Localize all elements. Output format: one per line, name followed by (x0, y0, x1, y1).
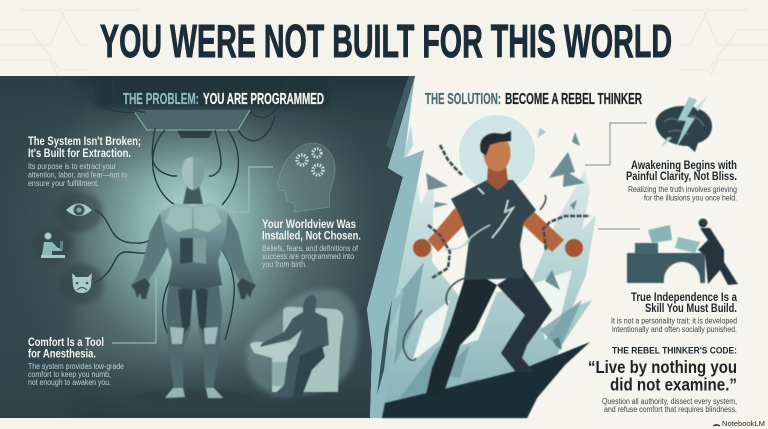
text block: the rebel thinker's code: Question all authority, dissect every system, (602, 397, 737, 406)
text block: the system (28, 136, 141, 188)
floor shadow (131, 389, 255, 403)
arms (132, 213, 256, 286)
chair back (272, 307, 343, 392)
text block: comfort: not enough to awaken you. (28, 378, 111, 387)
heading: the solution: THE SOLUTION: (425, 91, 501, 108)
neck (183, 186, 203, 204)
text block: comfort: comfort to keep you numb, (28, 370, 111, 379)
neck (487, 166, 508, 190)
text block: worldview: Your Worldview Was (262, 219, 356, 231)
text block: awakening: Awakening Begins with (631, 160, 737, 172)
lightning divider (367, 76, 424, 418)
machine and cables (80, 76, 290, 380)
text block: comfort: Comfort Is a Tool (28, 337, 104, 349)
text block: comfort: The system provides low-grade (28, 362, 124, 371)
text block: worldview: success are programmed into (262, 252, 354, 261)
text block: independence: True Independence Is a (631, 292, 737, 304)
robot human figure (131, 157, 256, 403)
panel: the solution background (375, 76, 768, 418)
darker shard facets (385, 262, 582, 417)
icon: brain with lightning (656, 95, 712, 152)
illustration: person in armchair with smoke (246, 289, 358, 400)
fists (413, 239, 583, 257)
cables (80, 76, 290, 380)
icon: head with gears (278, 143, 335, 212)
broken chains (428, 145, 590, 278)
heading: the problem: YOU ARE PROGRAMMED (203, 91, 324, 108)
NotebookLM logo: NotebookLM (722, 419, 765, 428)
smoke (246, 289, 358, 395)
chest plates (165, 206, 222, 232)
text block: independence (611, 292, 737, 334)
feet (165, 388, 223, 398)
halo (459, 115, 535, 191)
text block: awakening (626, 160, 737, 202)
text block: the rebel thinker's code: and refuse comfort that requires blindness. (604, 405, 737, 414)
text block: the rebel thinker's code (588, 346, 737, 414)
heading: the problem (123, 91, 324, 108)
text block: the system: The System Isn't Broken; (28, 136, 141, 148)
text block: the system: It's Built for Extraction. (28, 148, 131, 160)
knee plates (170, 327, 218, 344)
head (182, 157, 204, 190)
shard burst behind the man (378, 125, 596, 418)
swirl (445, 225, 490, 250)
text block: independence: intentionally and often socially punished. (612, 325, 737, 334)
panel: the problem background (0, 60, 415, 429)
head (484, 134, 510, 172)
text block: the system: attention, labor, and fear—not to (28, 170, 127, 180)
illustration: rebel thinker breaking chains (382, 128, 590, 418)
icon: person building wall (627, 218, 738, 285)
loose cables (403, 195, 546, 360)
text block: worldview: Beliefs, fears, and definitions of (262, 244, 359, 253)
left arm (428, 208, 467, 252)
inner leg shadows (178, 285, 208, 335)
heading: the solution: BECOME A REBEL THINKER (505, 91, 642, 108)
text block: worldview (262, 219, 361, 269)
heading: the solution (425, 91, 642, 108)
text block: the system: ensure your fulfillment. (28, 179, 99, 188)
legs (166, 272, 222, 390)
shirt (451, 180, 536, 280)
text block: the system: Its purpose is to extract your (28, 162, 116, 171)
text block: independence: It is not a personality trait: it is developed (611, 316, 737, 326)
seated figure (260, 295, 329, 398)
connector lines: right side (585, 123, 647, 229)
text block: the rebel thinker's code: “Live by nothing you (588, 357, 737, 377)
abdomen (180, 238, 193, 264)
text block: awakening: Painful Clarity, Not Bliss. (626, 171, 737, 183)
shirt crack highlight (478, 188, 513, 238)
flying shards (426, 128, 585, 350)
front leg (497, 268, 552, 372)
connector lines (112, 167, 273, 343)
icon: person at desk (32, 227, 72, 263)
text block: awakening: Realizing the truth involves grieving (628, 185, 737, 194)
text block: the rebel thinker's code: THE REBEL THINKER'S CODE: (612, 346, 737, 356)
text block: awakening: for the illusions you once held. (644, 194, 737, 202)
head sockets (177, 173, 182, 178)
text block: comfort: for Anesthesia. (28, 348, 96, 360)
back leg (426, 268, 497, 395)
heading: the problem: THE PROBLEM: (123, 91, 199, 108)
hands (131, 278, 256, 299)
torso (160, 203, 228, 290)
icon: eye (55, 192, 103, 232)
text block: worldview: Installed, Not Chosen. (262, 230, 361, 242)
decorative circuit traces (0, 10, 768, 85)
hair (480, 131, 511, 156)
chair arm (250, 340, 300, 392)
icon: devil face (60, 264, 104, 304)
ground (382, 342, 590, 418)
text block: independence: Skill You Must Build. (645, 303, 737, 315)
pale shards near the legs (412, 270, 572, 362)
text block: worldview: you from birth. (262, 260, 307, 269)
text block: comfort (28, 337, 124, 387)
right arm (520, 208, 564, 252)
text block: the rebel thinker's code: did not examine.” (610, 374, 737, 394)
